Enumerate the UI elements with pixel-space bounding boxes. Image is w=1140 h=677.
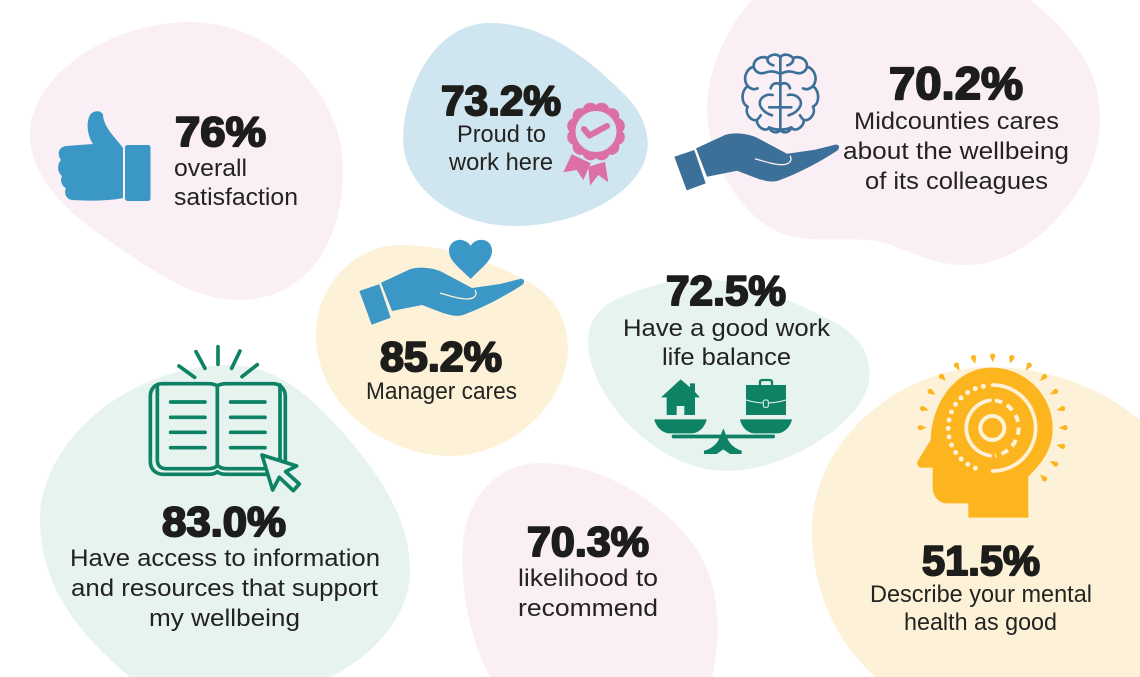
panel: likelihood to recommend: [462, 463, 718, 677]
statistic: 73.2%: 73.2%: [441, 77, 561, 124]
statistic: 70.2%: 70.2%: [889, 58, 1023, 109]
label: likelihood to recommend: likelihood to: [518, 565, 658, 592]
label: overall satisfaction: [174, 155, 298, 211]
panel: proud to work here: [403, 23, 648, 226]
statistic: 85.2%: 85.2%: [380, 333, 502, 380]
label: likelihood to recommend: [518, 565, 658, 622]
icon: head with target: [917, 353, 1068, 518]
label: have a good work life balance: [623, 315, 831, 371]
label: have a good work life balance: Have a good work: [623, 315, 831, 342]
label: likelihood to recommend: recommend: [518, 595, 658, 622]
label: Midcounties cares about the wellbeing of its colleagues: Midcounties cares: [854, 108, 1059, 135]
label: proud to work here: [448, 121, 553, 176]
label: Midcounties cares about the wellbeing of its colleagues: of its colleagues: [865, 168, 1048, 195]
panel: mental health: [812, 353, 1140, 677]
label: describe your mental health as good: [870, 581, 1092, 636]
panel: access to information: [40, 347, 410, 677]
label: overall satisfaction: satisfaction: [174, 184, 298, 211]
label: access to information: my wellbeing: [149, 605, 300, 632]
label: access to information: and resources that support: [71, 575, 378, 602]
icon: brain: [743, 55, 818, 132]
label: proud to work here: work here: [448, 149, 553, 176]
panel: work life balance: [588, 267, 869, 471]
label: Midcounties cares about the wellbeing of its colleagues: about the wellbeing: [843, 138, 1069, 165]
statistic: 51.5%: 51.5%: [922, 537, 1040, 584]
icon: hand with heart: [359, 240, 524, 325]
label: manager cares: Manager cares: [366, 378, 517, 405]
label: describe your mental health as good: health as good: [904, 609, 1057, 636]
panel: manager cares: [316, 240, 568, 456]
icon: open book with cursor: [150, 347, 299, 491]
label: proud to work here: Proud to: [457, 121, 546, 148]
statistic: 76%: 76%: [175, 108, 266, 155]
icon: rosette: [563, 103, 625, 186]
label: overall satisfaction: overall: [174, 155, 247, 182]
icon: balance scale with house and briefcase: [654, 379, 792, 454]
label: have a good work life balance: life balance: [662, 344, 791, 371]
statistic: 70.3%: 70.3%: [527, 518, 649, 565]
statistic: 83.0%: 83.0%: [162, 498, 286, 545]
icon: hand: [674, 133, 839, 190]
statistic: 72.5%: 72.5%: [666, 267, 786, 314]
label: Midcounties cares about the wellbeing of its colleagues: [843, 108, 1069, 195]
panel: wellbeing of colleagues: [674, 0, 1100, 265]
label: access to information: [70, 545, 380, 632]
panel: overall satisfaction: [30, 22, 343, 300]
icon: thumbs up: [58, 111, 150, 201]
label: access to information: Have access to information: [70, 545, 380, 572]
label: describe your mental health as good: Describe your mental: [870, 581, 1092, 608]
